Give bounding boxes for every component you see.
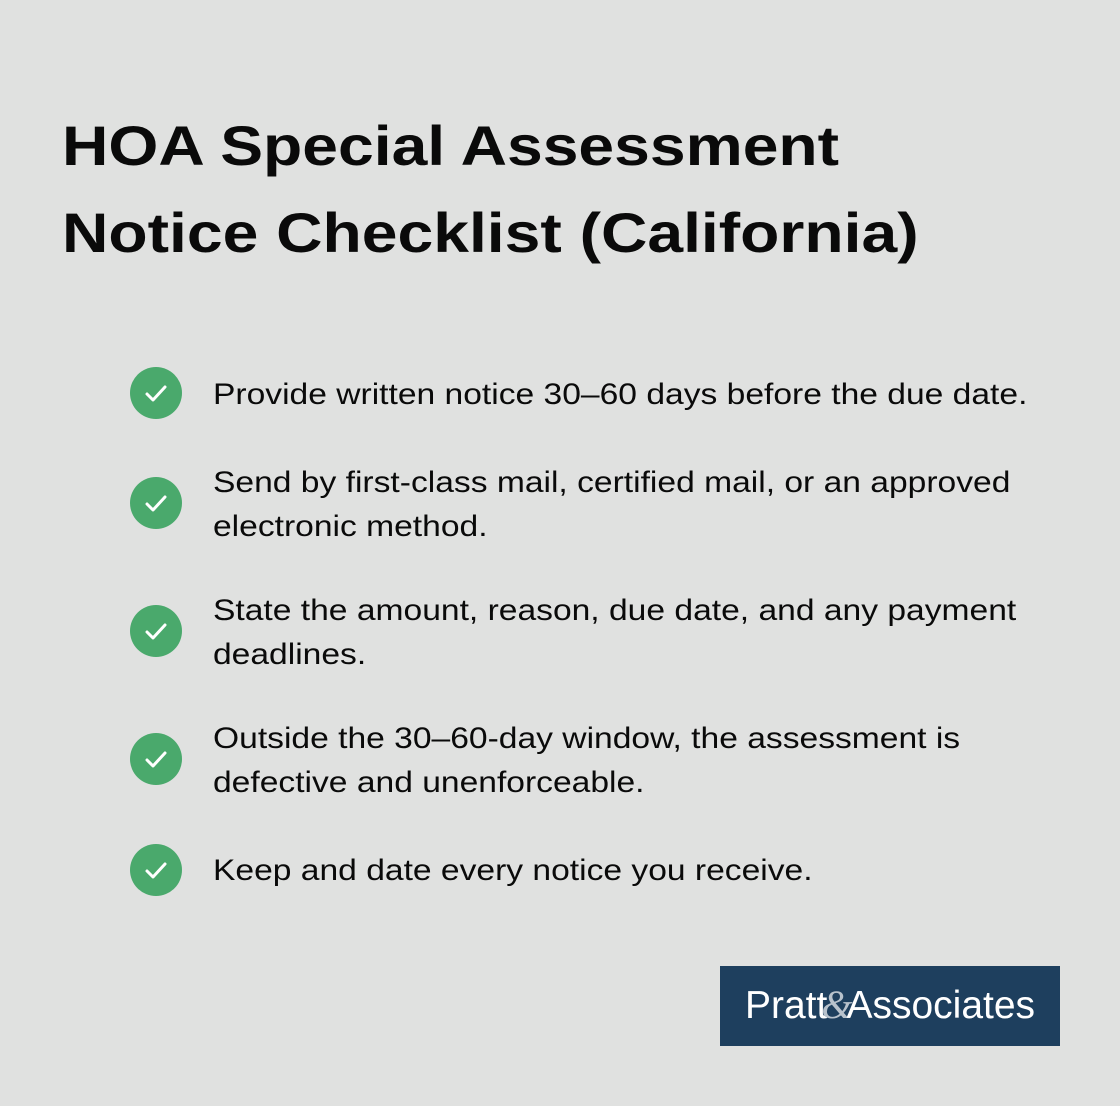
icon: check 1 <box>130 367 182 419</box>
icon: check 2 <box>130 477 182 529</box>
icon: check 4 <box>130 733 182 785</box>
title <box>62 114 919 264</box>
item 2 text: electronic method. <box>213 510 488 543</box>
item 2 text <box>213 466 1010 543</box>
checklist <box>130 367 1027 896</box>
item 5 text: Keep and date every notice you receive. <box>213 854 813 887</box>
item 3 text: deadlines. <box>213 638 366 671</box>
icon: check 5 <box>130 844 182 896</box>
item 4 text <box>213 722 960 799</box>
item 2 text: Send by first-class mail, certified mail, or an approved <box>213 466 1010 499</box>
logo <box>720 966 1060 1046</box>
item 3 text: State the amount, reason, due date, and any payment <box>213 594 1016 627</box>
title: HOA Special Assessment <box>62 114 839 177</box>
item 4 text: defective and unenforceable. <box>213 766 645 799</box>
icon: check 3 <box>130 605 182 657</box>
logo: Pratt&Associates <box>745 982 1035 1027</box>
item 3 text <box>213 594 1016 671</box>
title: Notice Checklist (California) <box>62 201 919 264</box>
item 4 text: Outside the 30–60-day window, the assessment is <box>213 722 960 755</box>
item 1 text: Provide written notice 30–60 days before the due date. <box>213 378 1027 411</box>
